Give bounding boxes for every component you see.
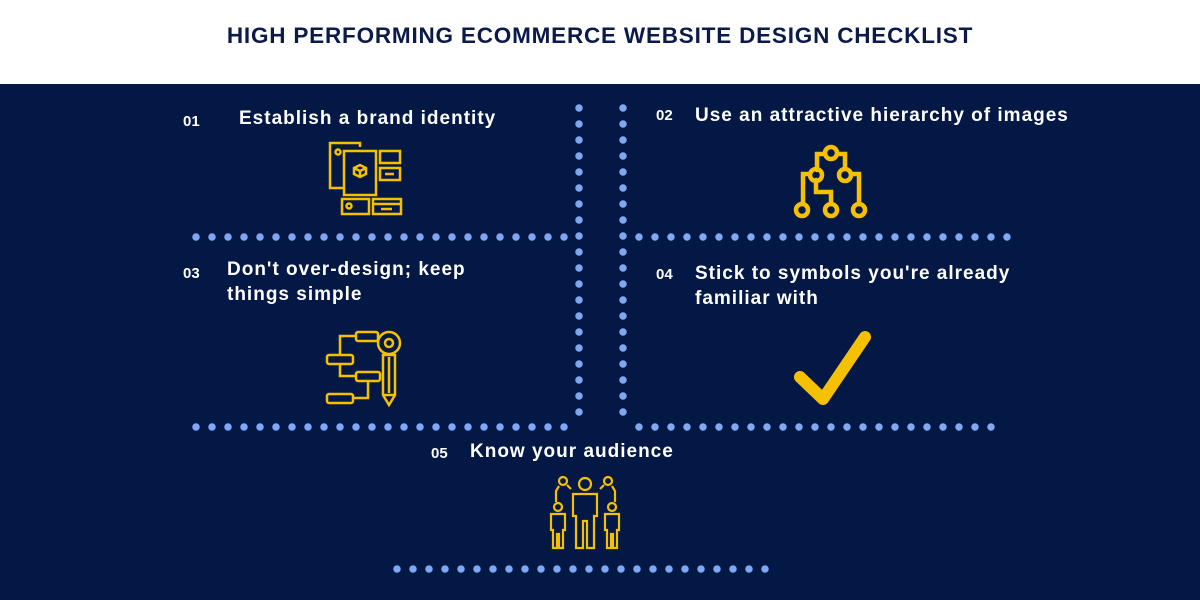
icon: simple design xyxy=(327,332,400,405)
item 03: Don't over-design; keep xyxy=(227,259,466,280)
icon: checkmark xyxy=(800,337,865,399)
item 01: Establish a brand identity xyxy=(239,108,496,129)
item 03 xyxy=(183,259,466,305)
icon: brand identity xyxy=(330,143,401,214)
item 04: Stick to symbols you're already xyxy=(695,263,1010,284)
item 05: Know your audience xyxy=(470,441,674,462)
item 04 xyxy=(656,263,1010,309)
item 03: things simple xyxy=(227,284,362,305)
item 03: 03 xyxy=(183,265,200,282)
item 04: familiar with xyxy=(695,288,819,309)
icon: audience xyxy=(551,477,619,548)
header band xyxy=(0,0,1200,84)
title: HIGH PERFORMING ECOMMERCE WEBSITE DESIGN CHECKLIST xyxy=(227,23,973,48)
item 05: 05 xyxy=(431,445,448,462)
item 02: 02 xyxy=(656,107,673,124)
item 01: 01 xyxy=(183,113,200,130)
item 04: 04 xyxy=(656,266,673,283)
icon: hierarchy xyxy=(796,147,865,216)
item 02: Use an attractive hierarchy of images xyxy=(695,105,1069,126)
